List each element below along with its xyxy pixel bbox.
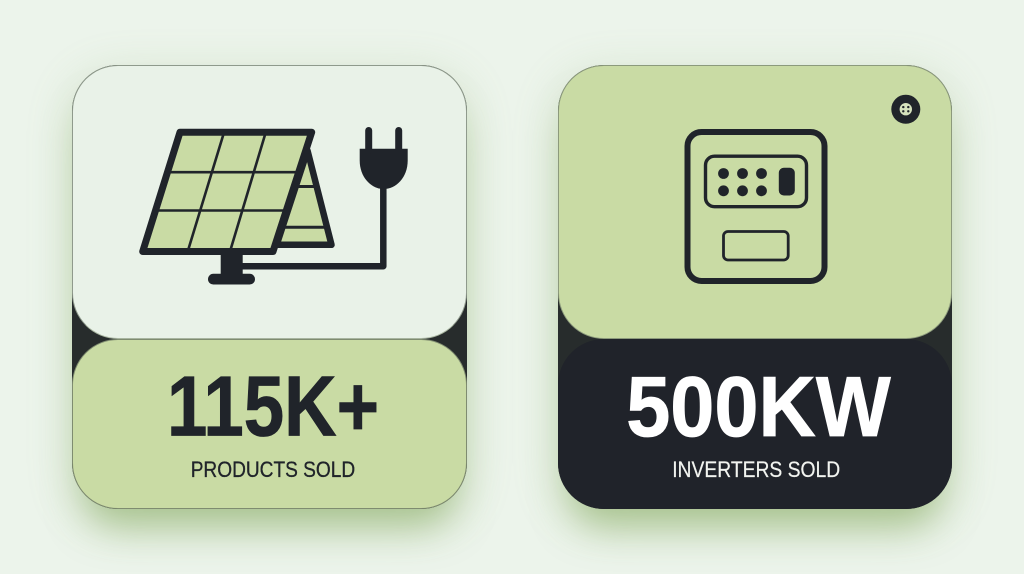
label: inverters sold: INVERTERS SOLD [672, 457, 840, 482]
panel: inverter icon panel [558, 64, 952, 339]
icon: solar panel with plug [139, 127, 408, 284]
card: products sold [72, 64, 466, 509]
icon: inverter [687, 132, 824, 280]
panel: solar icon panel [72, 64, 466, 339]
panel: inverters sold stat [558, 339, 952, 509]
panel: products sold stat [72, 339, 466, 509]
icon: badge [891, 94, 920, 123]
label: products sold: PRODUCTS SOLD [191, 457, 355, 482]
card: inverters sold [558, 64, 952, 509]
stat: 115K+: 115K+ [167, 360, 379, 455]
stat: 500KW: 500KW [626, 360, 891, 455]
